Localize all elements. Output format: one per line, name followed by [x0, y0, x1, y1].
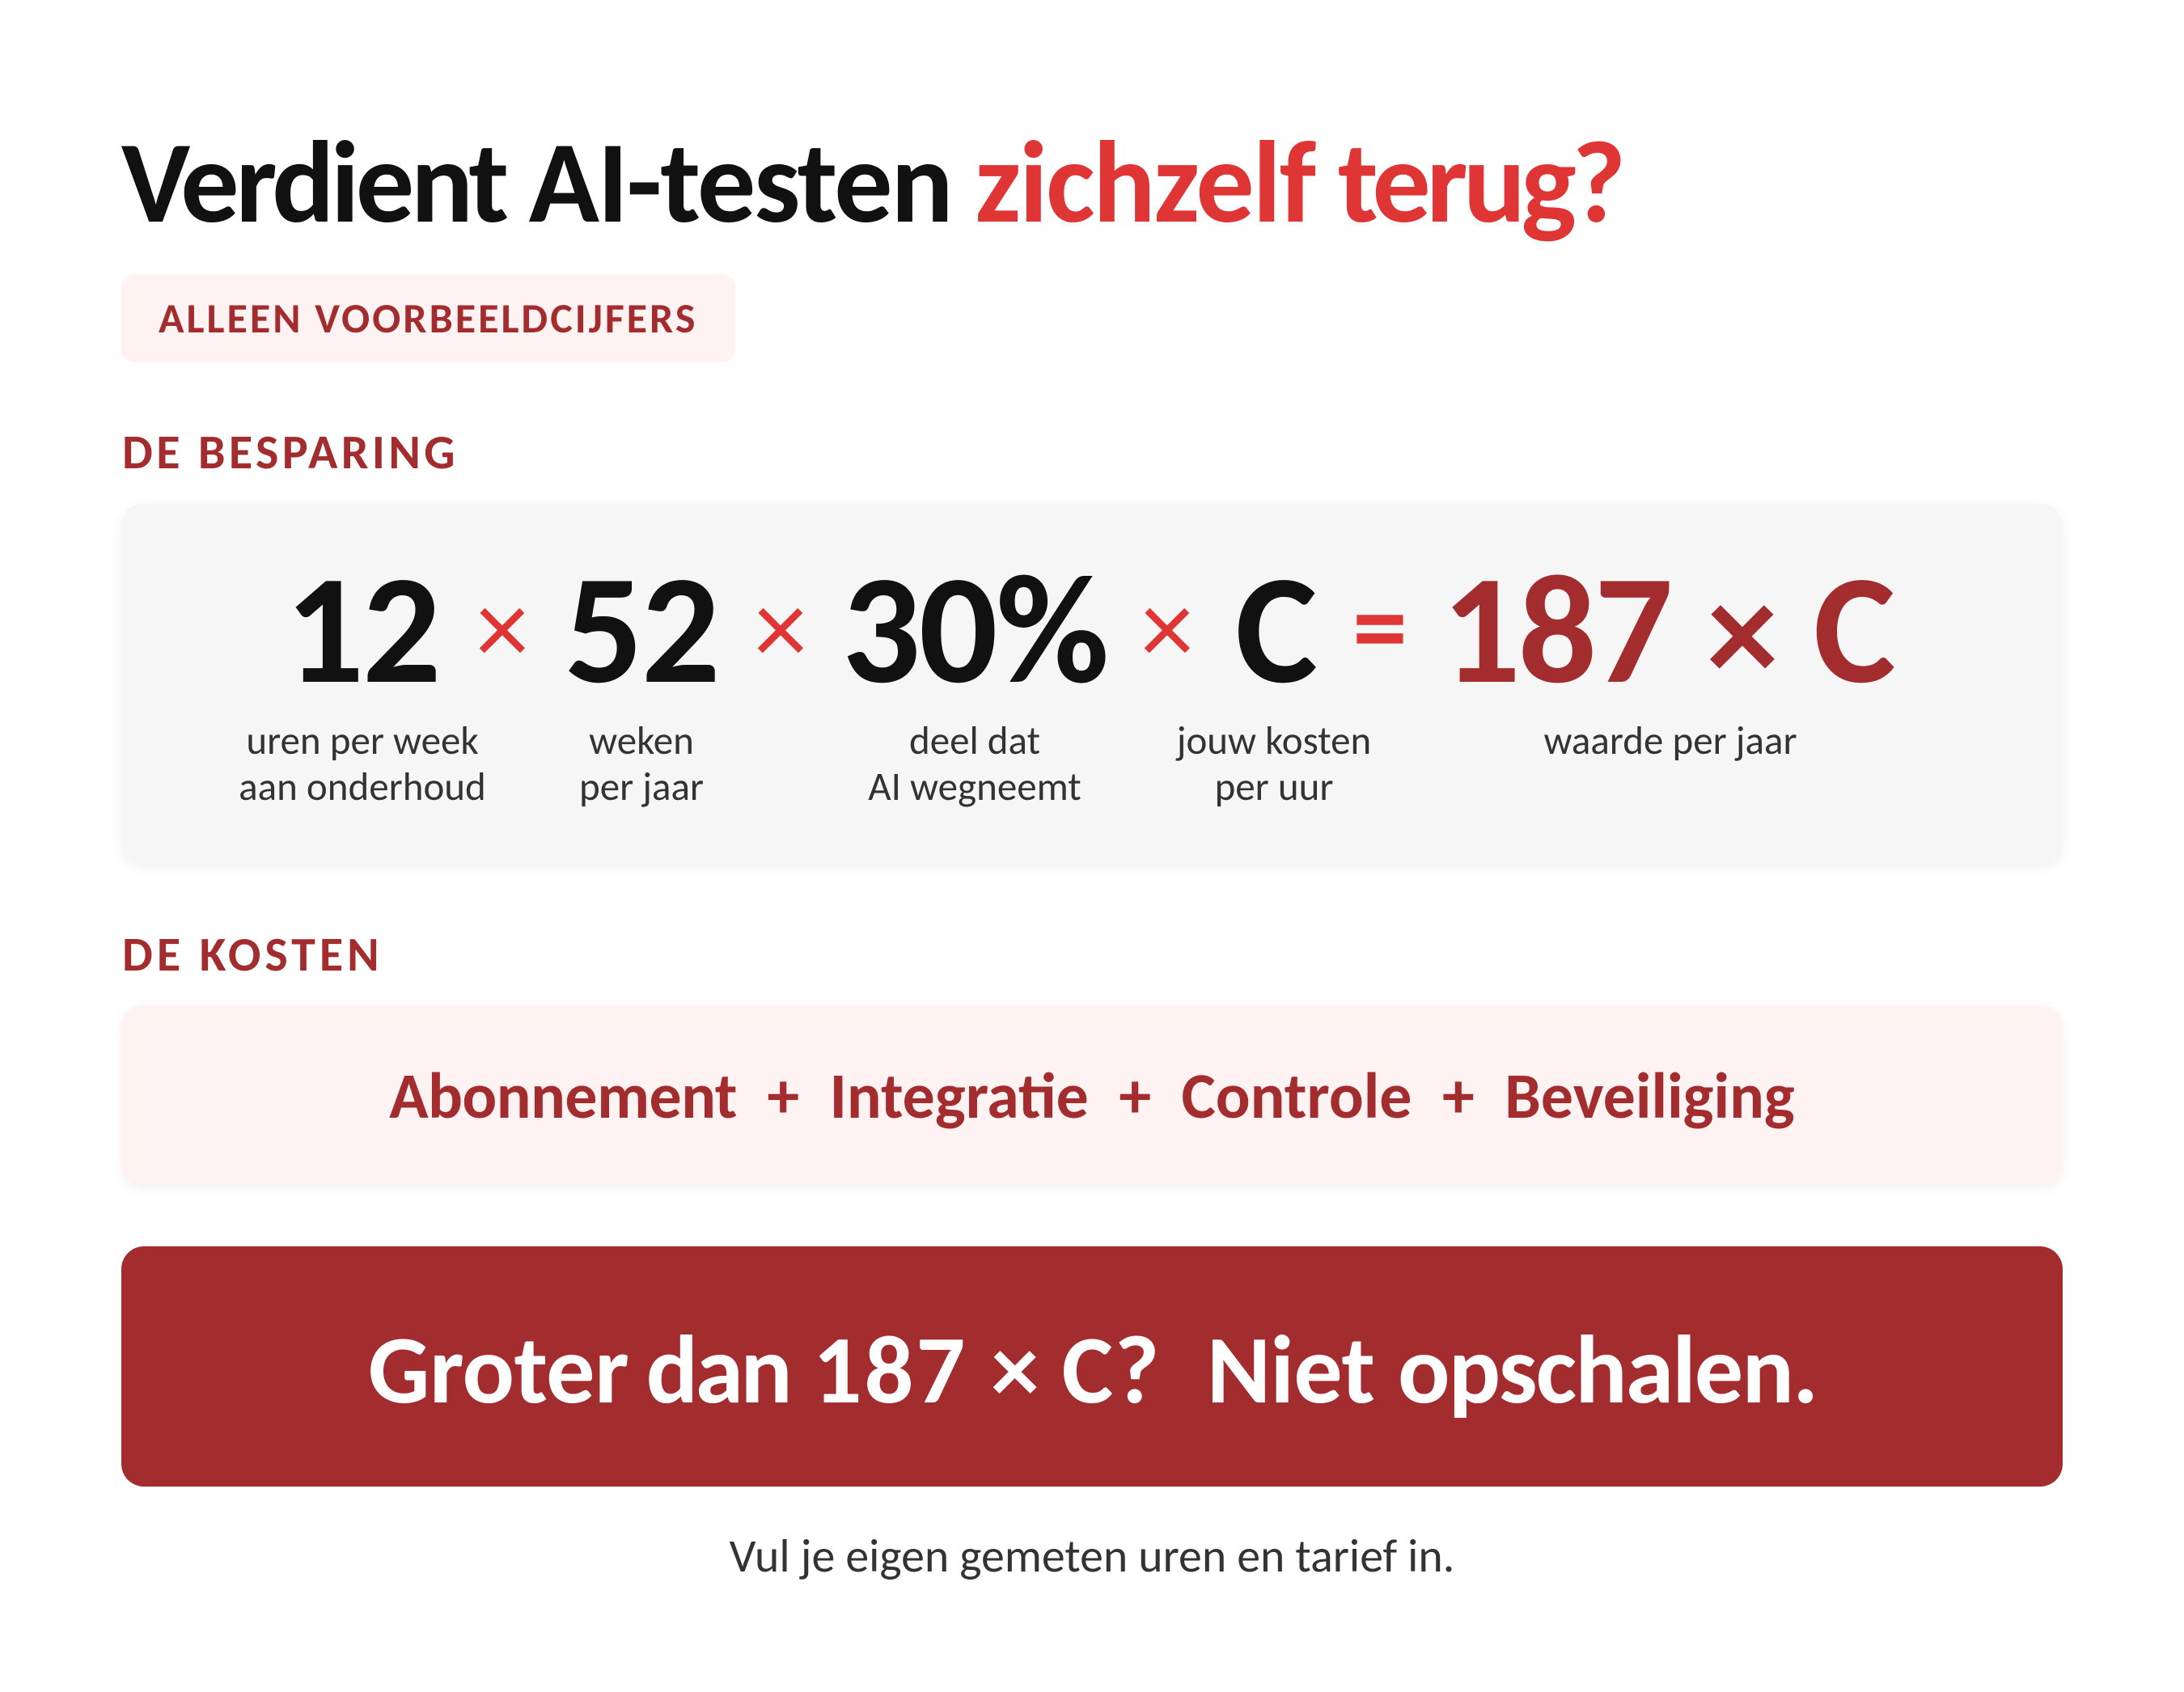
footnote: Vul je eigen gemeten uren en tarief in. [730, 1527, 1454, 1584]
operator: times: × [476, 563, 529, 693]
label: uren per week: uren per week aan onderhoud [239, 717, 486, 811]
verdict text: Groter dan 187 × C? Niet opschalen. [368, 1311, 1817, 1429]
number: 30%: 30% [842, 534, 1107, 724]
operator: times: × [754, 563, 807, 693]
callout: verdict [121, 1246, 2063, 1487]
badge: alleen voorbeeldcijfers: ALLEEN VOORBEELDCIJFERS [159, 292, 697, 344]
badge: alleen voorbeeldcijfers [121, 274, 735, 362]
label: deel dat AI wegneemt: deel dat AI wegneemt [868, 717, 1081, 811]
number: 12: 12 [286, 534, 439, 724]
label: jouw kosten per uur: jouw kosten per uur [1177, 717, 1371, 811]
operator: equals: = [1352, 560, 1407, 694]
label: weken per jaar: weken per jaar [579, 717, 704, 811]
cost formula: Abonnement + Integratie + Controle + Beveiliging [389, 1057, 1795, 1136]
heading: de kosten: DE KOSTEN [122, 925, 383, 984]
number: 52: 52 [565, 534, 718, 724]
panel: savings formula [121, 504, 2063, 865]
operator: times: × [1141, 563, 1194, 693]
title: Verdient AI-testen zichzelf terug? [121, 111, 1621, 253]
heading: de besparing: DE BESPARING [122, 423, 459, 482]
result: 187 x C: 187 × C [1441, 534, 1894, 724]
panel: costs [121, 1005, 2063, 1185]
variable: C: C [1235, 534, 1316, 724]
label: waarde per jaar: waarde per jaar [1543, 717, 1797, 765]
